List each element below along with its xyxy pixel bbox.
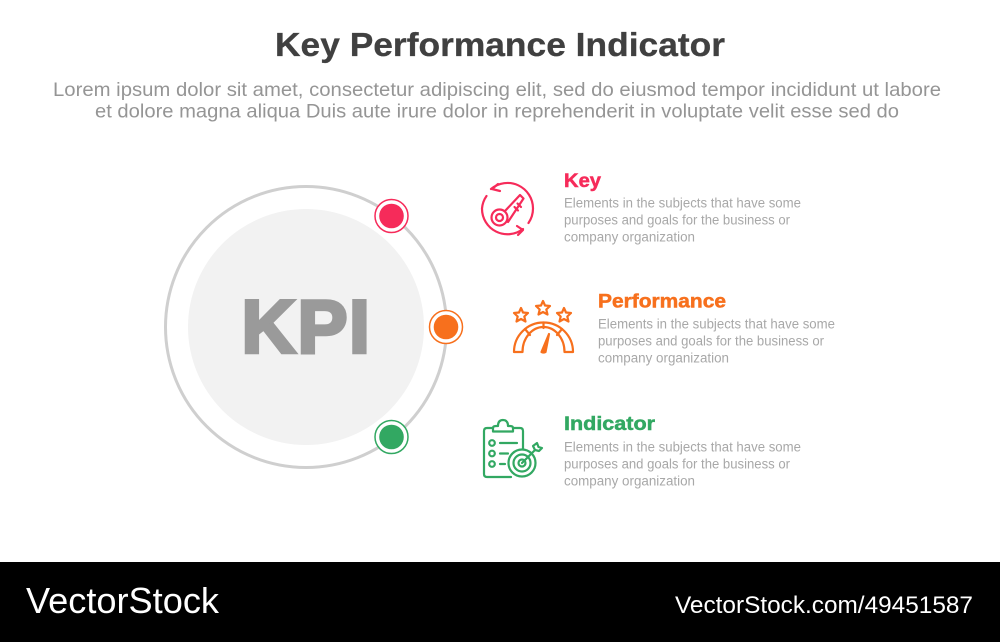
description: indicator: purposes and goals for the business or bbox=[564, 456, 790, 472]
footer bar bbox=[0, 562, 1000, 642]
KPI label: KPI bbox=[242, 284, 370, 368]
footer url: VectorStock.com/49451587 bbox=[675, 592, 973, 619]
panel: KPI circle diagram bbox=[166, 186, 462, 468]
marker: performance bbox=[430, 310, 462, 344]
description: key: Elements in the subjects that have some bbox=[564, 196, 801, 210]
heading: performance: Performance bbox=[598, 290, 726, 312]
description: performance bbox=[598, 316, 835, 366]
icon: key with rotating arrows bbox=[482, 183, 533, 235]
icon: clipboard with target bbox=[484, 420, 542, 477]
marker: key bbox=[375, 200, 408, 232]
description: indicator bbox=[564, 440, 801, 488]
footer logo: VectorStock bbox=[26, 580, 220, 621]
heading: indicator: Indicator bbox=[564, 413, 655, 435]
text block: key bbox=[564, 171, 801, 244]
description: key: purposes and goals for the business or bbox=[564, 212, 790, 228]
heading: key: Key bbox=[564, 171, 601, 192]
description: performance: company organization bbox=[598, 350, 729, 366]
description: indicator: Elements in the subjects that have some bbox=[564, 440, 801, 454]
title: Key Performance Indicator bbox=[275, 26, 725, 63]
subtitle text: Lorem ipsum dolor sit amet, consectetur adipiscing elit, sed do eiusmod tempor incididunt ut labore bbox=[53, 79, 941, 101]
text block: performance bbox=[598, 290, 835, 366]
subtitle text: et dolore magna aliqua Duis aute irure dolor in reprehenderit in voluptate velit esse sed do bbox=[95, 100, 899, 122]
description: performance: purposes and goals for the business or bbox=[598, 334, 824, 348]
inner disc bbox=[188, 209, 424, 445]
outer ring bbox=[166, 186, 446, 468]
subtitle text bbox=[53, 79, 941, 122]
description: indicator: company organization bbox=[564, 474, 695, 488]
icon: gauge with stars bbox=[514, 301, 573, 352]
marker: indicator bbox=[375, 420, 408, 454]
description: key: company organization bbox=[564, 230, 695, 244]
description: key bbox=[564, 196, 801, 244]
description: performance: Elements in the subjects that have some bbox=[598, 316, 835, 332]
text block: indicator bbox=[564, 413, 801, 488]
